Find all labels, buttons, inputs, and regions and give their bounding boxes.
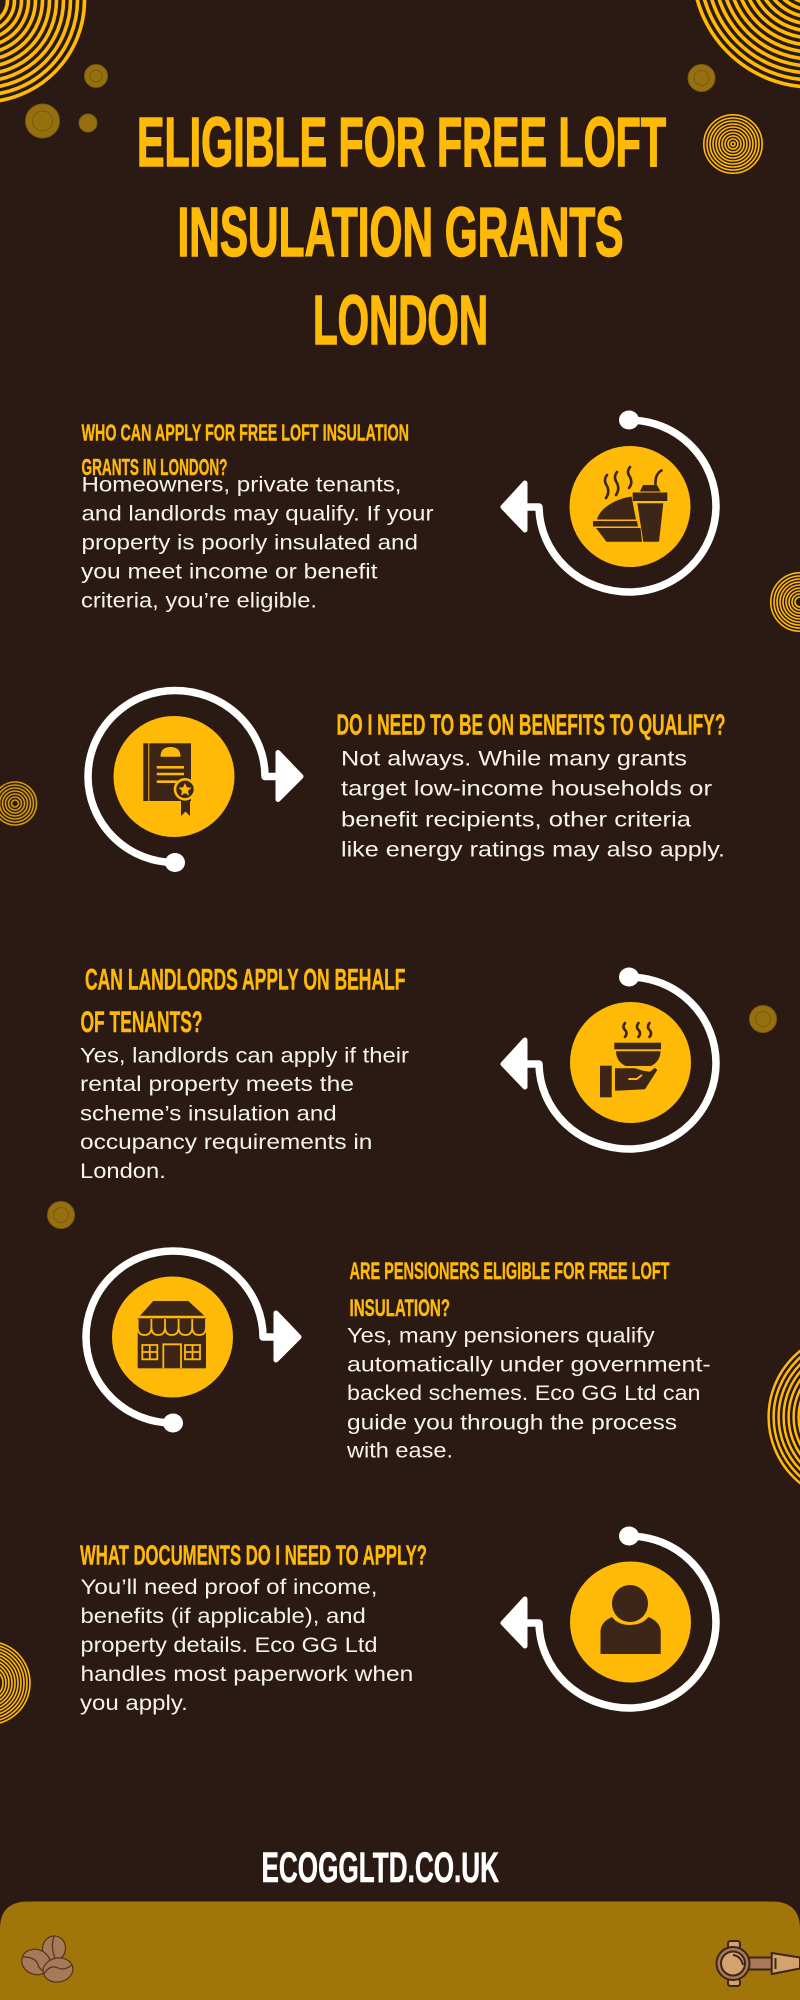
heading: pensioners [350,1258,670,1322]
text block: benefits answer: Not always. While many grants [341,748,687,770]
arrow ring: step 4 [86,1251,299,1432]
icon: hand holding bowl [570,1002,691,1123]
text block: who can apply answer [81,474,434,612]
panel: pensioners [86,1251,711,1463]
footer band [0,1902,800,2000]
heading: documents: WHAT DOCUMENTS DO I NEED TO APPLY? [80,1540,427,1571]
arrow ring: step 2 [88,690,301,872]
text block: who can apply answer: Homeowners, private tenants, [82,474,402,496]
text block: documents answer: you apply. [80,1692,188,1715]
decoration: large right edge rings [769,1332,800,1502]
text block: landlords answer: Yes, landlords can apply if their [80,1044,409,1067]
title: LONDON [313,281,488,359]
icon: storefront [112,1276,233,1398]
text block: who can apply answer: you meet income or benefit [81,560,378,584]
icon: person [570,1562,691,1682]
text block: who can apply answer: criteria, you’re eligible. [81,590,317,612]
decoration: bright ring disc upper right [704,115,762,173]
text block: landlords answer: scheme’s insulation and [80,1102,337,1125]
heading: landlords: CAN LANDLORDS APPLY ON BEHALF [85,963,406,996]
text block: pensioners answer [346,1325,711,1463]
text block: pensioners answer: guide you through the process [347,1411,677,1434]
text block: who can apply answer: and landlords may qualify. If your [82,502,434,526]
decoration: left edge ring disc [0,782,36,825]
text block: benefits answer: like energy ratings may also apply. [341,839,725,862]
panel: do I need benefits [88,690,726,872]
decoration: right edge ring disc [771,573,800,631]
text block: pensioners answer: Yes, many pensioners qualify [347,1325,655,1348]
text block: landlords answer: rental property meets the [80,1073,354,1096]
heading: who can apply: WHO CAN APPLY FOR FREE LOFT INSULATION [82,420,409,446]
panel: documents [80,1526,716,1715]
website url: ECOGGLTD.CO.UK [262,1844,499,1892]
text block: who can apply answer: property is poorly insulated and [82,532,418,554]
text block: documents answer: property details. Eco GG Ltd [80,1634,378,1657]
heading: who can apply [82,420,409,480]
heading: landlords: OF TENANTS? [80,1006,202,1039]
icon: portafilter [716,1941,800,1986]
title [137,103,666,359]
text block: pensioners answer: backed schemes. Eco GG Ltd can [347,1382,700,1405]
decoration: top-left concentric rings [0,0,84,102]
icon: food box and drink [570,446,690,567]
heading: who can apply: GRANTS IN LONDON? [82,454,228,480]
heading: landlords [80,963,406,1039]
text block: landlords answer [80,1044,409,1183]
icon: coffee beans [18,1934,75,1984]
text block: pensioners answer: with ease. [346,1440,453,1463]
arrow ring: step 5 [503,1526,716,1708]
text block: documents answer: You’ll need proof of income, [80,1576,378,1599]
text block: benefits answer: benefit recipients, other criteria [341,808,691,831]
panel: who can apply [81,410,716,612]
text block: landlords answer: occupancy requirements in [80,1131,372,1154]
decoration: top-right concentric rings [693,0,800,87]
text block: pensioners answer: automatically under government- [347,1353,711,1376]
arrow ring: step 3 [503,968,716,1149]
decoration: lower left edge rings [0,1642,30,1724]
text block: documents answer: benefits (if applicable), and [80,1605,366,1628]
text block: documents answer: handles most paperwork when [80,1663,413,1686]
text block: benefits answer: target low-income households or [341,778,712,801]
text block: landlords answer: London. [80,1160,166,1183]
text block: benefits answer [341,748,725,862]
arrow ring: step 1 [503,410,716,592]
heading: pensioners: INSULATION? [350,1295,450,1322]
panel: landlords [80,963,716,1183]
text block: documents answer [80,1576,413,1715]
icon: certificate booklet [114,716,234,837]
decoration: small dim discs [26,64,776,1228]
